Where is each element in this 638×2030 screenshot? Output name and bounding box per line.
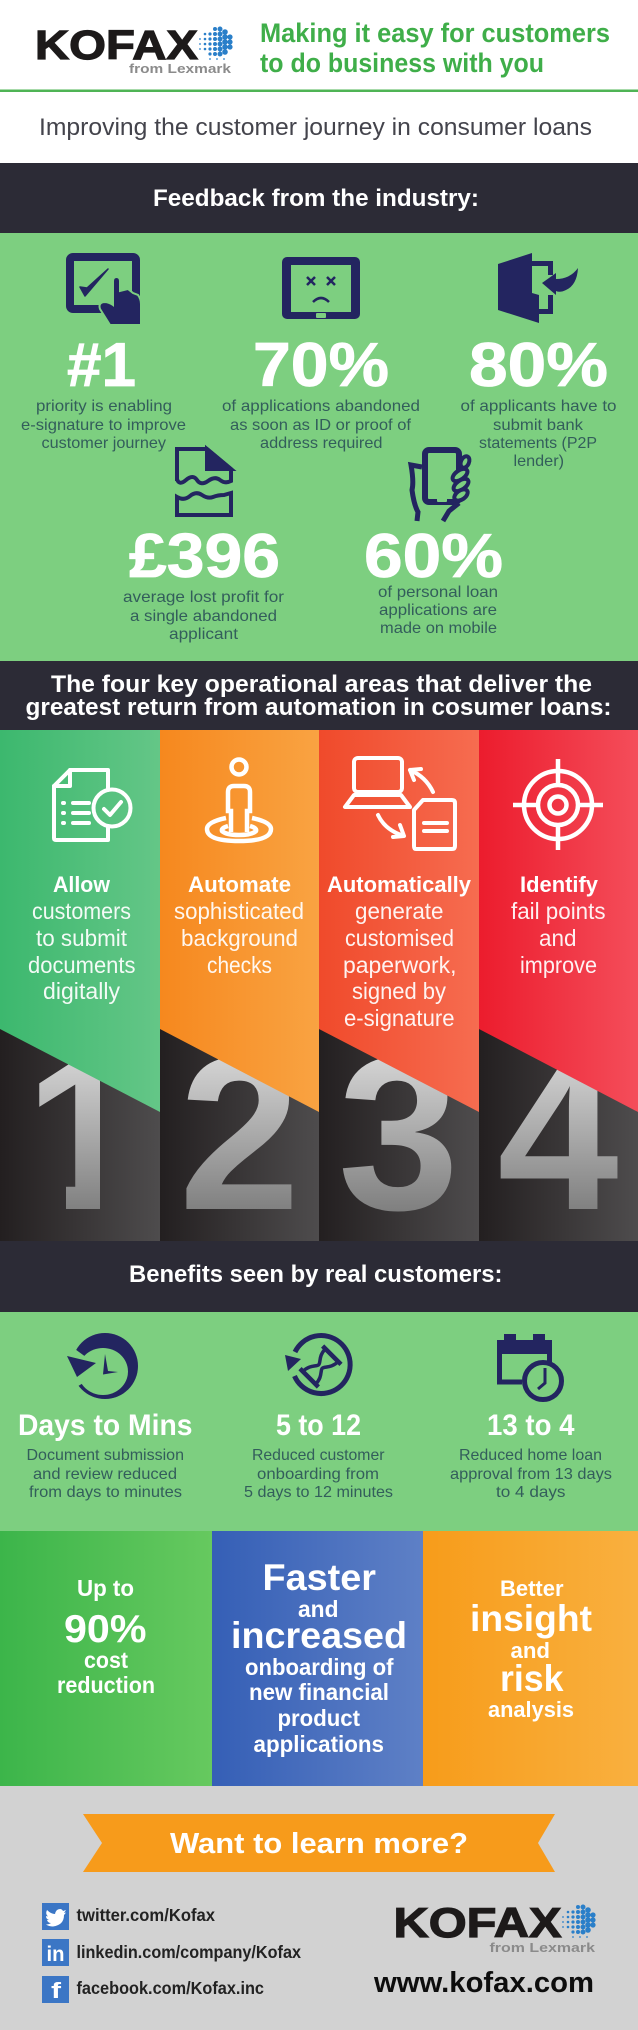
text: column 3: generate — [355, 898, 444, 924]
section band: four key operational areas: greatest return from automation in cosumer loans: — [26, 694, 612, 721]
section band: feedback: Feedback from the industry: — [153, 185, 479, 212]
logo: Kofax footer — [394, 1899, 596, 1955]
text: column 1 — [28, 872, 136, 1004]
title — [260, 18, 610, 78]
text: column 2: background — [181, 925, 298, 951]
panel: better insight: Better — [500, 1576, 564, 1601]
numeral 2: 2 — [179, 1013, 300, 1256]
panel: faster onboarding: applications — [254, 1731, 384, 1757]
stat: #1: e-signature to improve — [21, 417, 186, 434]
panel: faster onboarding: onboarding of — [245, 1654, 394, 1680]
panel: cost reduction: Up to — [77, 1575, 134, 1601]
stat: days to mins: from days to minutes — [29, 1484, 182, 1501]
panel: better insight: insight — [470, 1598, 592, 1639]
text: column 4: Identify — [520, 872, 599, 897]
website: www.kofax.com — [373, 1967, 594, 1999]
text: column 4: fail points — [511, 898, 606, 924]
stat: 80%: statements (P2P — [479, 435, 597, 452]
social: twitter — [42, 1903, 215, 1930]
icon: clock with back arrow — [60, 1333, 138, 1399]
text: column 3: signed by — [352, 978, 446, 1004]
text: column 3: customised — [345, 925, 454, 951]
numeral 1: 1 — [24, 1013, 146, 1256]
icon: hourglass with arrow ring — [285, 1336, 350, 1394]
text: column 4 — [511, 872, 606, 978]
section band: benefits — [0, 1241, 638, 1312]
text: column 3: paperwork, — [343, 952, 456, 978]
stat: £396: £396 — [129, 522, 280, 591]
panel: faster onboarding: Faster — [262, 1557, 376, 1598]
panel: cost reduction: 90% — [64, 1608, 146, 1651]
title: Making it easy for customers — [260, 18, 610, 48]
stat: £396: a single abandoned — [130, 608, 277, 625]
icon: laptop and document exchange — [345, 758, 455, 849]
icon: torn document — [177, 449, 231, 515]
panel: cost reduction: cost — [84, 1647, 128, 1673]
panel: cost reduction: reduction — [57, 1672, 155, 1698]
stat: 13 to 4: Reduced home loan — [459, 1447, 602, 1464]
stat: £396: applicant — [169, 626, 239, 643]
stat: 60%: of personal loan — [378, 584, 498, 601]
social: twitter: twitter.com/Kofax — [76, 1905, 215, 1925]
text: column 3: e-signature — [344, 1005, 454, 1031]
panel: better insight — [423, 1531, 638, 1786]
social: facebook — [42, 1976, 264, 2003]
stat: 13 to 4: to 4 days — [496, 1484, 566, 1501]
logo: Kofax from Lexmark: from Lexmark — [129, 61, 232, 76]
ribbon: want to learn more — [83, 1814, 555, 1872]
subtitle: Improving the customer journey in consumer loans — [39, 114, 592, 141]
text: column 1: customers — [32, 898, 131, 924]
stat: 70%: of applications abandoned — [222, 398, 420, 415]
panel: faster onboarding: and — [298, 1596, 338, 1622]
stat: 70%: as soon as ID or proof of — [230, 417, 412, 434]
text: column 4: improve — [520, 952, 597, 978]
column 2 banner — [160, 730, 319, 1112]
text: column 1: to submit — [36, 925, 127, 951]
panel: faster onboarding: new financial — [249, 1679, 389, 1705]
stat: 80%: 80% — [469, 331, 608, 400]
stat: #1: customer journey — [42, 435, 166, 452]
social: facebook: facebook.com/Kofax.inc — [76, 1978, 264, 1998]
social: linkedin: in — [46, 1943, 64, 1966]
logo: Kofax footer: KOFAX — [394, 1899, 562, 1946]
panel: cost reduction — [0, 1531, 212, 1786]
stat: 60% — [364, 522, 503, 637]
stat: 80%: lender) — [514, 453, 564, 470]
ribbon: want to learn more: Want to learn more? — [170, 1828, 468, 1860]
stat: 5 to 12 — [244, 1409, 393, 1501]
column 3 banner — [319, 730, 479, 1112]
stat: 13 to 4 — [450, 1409, 612, 1501]
title: to do business with you — [260, 48, 544, 78]
social: linkedin: linkedin.com/company/Kofax — [76, 1942, 301, 1962]
section band: feedback — [0, 163, 638, 233]
icon: document with check — [54, 770, 130, 840]
stat: 80% — [460, 331, 617, 470]
numeral 3: 3 — [338, 1013, 459, 1256]
header — [0, 0, 638, 163]
column 1 banner — [0, 730, 160, 1112]
stat: #1 — [21, 331, 186, 452]
stat: #1: #1 — [67, 331, 136, 400]
panel: faster onboarding: product — [278, 1705, 360, 1731]
stat: 70%: address required — [260, 435, 382, 452]
stat: 80%: submit bank — [493, 417, 584, 434]
text: column 2: checks — [207, 952, 272, 978]
text: column 2 — [174, 872, 304, 978]
stat: 5 to 12: 5 to 12 — [276, 1409, 361, 1442]
panel: better insight: analysis — [488, 1697, 574, 1722]
social: linkedin — [42, 1939, 301, 1966]
text: column 1: digitally — [43, 978, 120, 1004]
panel: feedback from the industry — [0, 233, 638, 661]
panel: better insight: risk — [500, 1658, 564, 1699]
column 4 banner — [479, 730, 638, 1112]
icon: person on target — [207, 760, 271, 841]
panel: faster onboarding — [212, 1531, 423, 1786]
logo: Kofax from Lexmark — [35, 22, 232, 76]
stat: 13 to 4: 13 to 4 — [487, 1409, 575, 1442]
stat: 5 to 12: 5 days to 12 minutes — [244, 1484, 393, 1501]
logo: Kofax footer: from Lexmark — [490, 1940, 596, 1955]
stat: 5 to 12: onboarding from — [257, 1466, 379, 1483]
text: column 2: sophisticated — [174, 898, 304, 924]
numeral 4: 4 — [497, 1013, 619, 1256]
stat: 60%: applications are — [379, 602, 497, 619]
panel: better insight: and — [510, 1638, 550, 1663]
stat: days to mins: Document submission — [26, 1447, 184, 1464]
stat: £396: average lost profit for — [123, 589, 285, 606]
text: column 1: documents — [28, 952, 136, 978]
stat: 5 to 12: Reduced customer — [252, 1447, 385, 1464]
icon: calendar with clock — [497, 1334, 562, 1400]
social: facebook: f — [51, 1978, 62, 2003]
icon: sad tablet — [282, 257, 360, 319]
stat: #1: priority is enabling — [36, 398, 172, 415]
stat: 80%: of applicants have to — [460, 398, 617, 415]
panel: four operational areas — [0, 730, 638, 1256]
icon: hand holding phone — [411, 450, 471, 521]
stat: 60%: made on mobile — [380, 620, 497, 637]
stat: days to mins: and review reduced — [33, 1466, 177, 1483]
panel: faster onboarding: increased — [231, 1615, 407, 1656]
section band: four key operational areas — [0, 661, 638, 730]
text: column 4: and — [539, 925, 576, 951]
text: column 3 — [327, 872, 472, 1031]
text: column 1: Allow — [53, 872, 111, 897]
stat: 70%: 70% — [253, 331, 389, 400]
section band: benefits: Benefits seen by real customers: — [129, 1261, 502, 1288]
stat: 70% — [222, 331, 420, 452]
stat: 13 to 4: approval from 13 days — [450, 1466, 612, 1483]
stat: days to mins — [18, 1409, 192, 1501]
icon: door with arrow — [498, 253, 578, 323]
logo: Kofax from Lexmark: KOFAX — [35, 22, 198, 68]
text: column 2: Automate — [188, 872, 291, 897]
stat: 60%: 60% — [364, 522, 503, 591]
panel: benefits seen by real customers — [0, 1312, 638, 1531]
stat: £396 — [123, 522, 285, 643]
icon: target — [513, 759, 603, 850]
icon: tablet with check and hand — [70, 257, 141, 325]
section band: four key operational areas: The four key operational areas that deliver the — [51, 671, 592, 698]
text: column 3: Automatically — [327, 872, 472, 897]
panel: footer — [0, 1786, 638, 2030]
stat: days to mins: Days to Mins — [18, 1409, 192, 1442]
